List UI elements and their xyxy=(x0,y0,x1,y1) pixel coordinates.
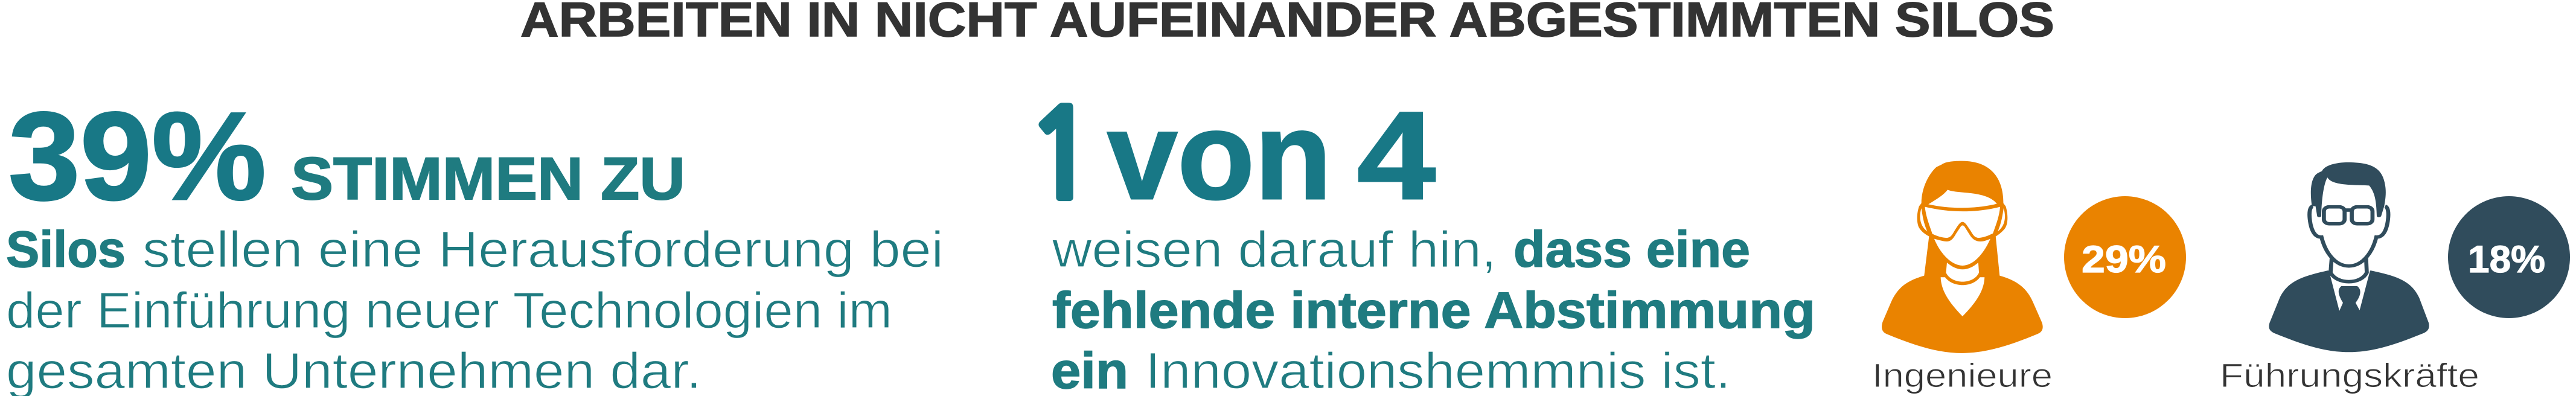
heading: stimmen zu: STIMMEN ZU xyxy=(291,145,685,212)
text block: silos description: Silos xyxy=(6,221,126,278)
big number: 39%: 39% xyxy=(8,86,266,226)
icon: engineer with goggles xyxy=(1882,161,2043,353)
circle: 18 percent: 18% xyxy=(2468,238,2545,281)
panel: executives xyxy=(2220,162,2570,394)
text block: innovation barrier: weisen darauf hin, xyxy=(1052,221,1497,278)
big number: 1 von 4 xyxy=(1025,86,1436,225)
icon: executive with glasses xyxy=(2269,162,2429,352)
text block: innovation barrier: fehlende interne Abstimmung xyxy=(1052,282,1815,339)
text block: innovation barrier: dass eine xyxy=(1513,221,1750,278)
label: executives: Führungskräfte xyxy=(2220,356,2479,394)
big number: 1 von 4: 1 xyxy=(1025,95,1099,217)
big number: 1 von 4: von xyxy=(1107,86,1332,225)
panel: 1 in 4 xyxy=(1025,86,1815,396)
text block: innovation barrier xyxy=(1051,221,1815,396)
panel: 39 percent agree xyxy=(6,86,944,396)
panel: engineers xyxy=(1872,161,2186,394)
text block: silos description xyxy=(6,221,944,396)
circle: 29 percent: 29% xyxy=(2082,238,2166,281)
label: engineers: Ingenieure xyxy=(1872,356,2053,394)
big number: 1 von 4: 4 xyxy=(1357,86,1436,225)
text block: silos description: der Einführung neuer Technologien im xyxy=(6,282,892,339)
circle: 18 percent xyxy=(2448,196,2570,318)
circle: 29 percent xyxy=(2064,196,2186,318)
text block: silos description: stellen eine Herausforderung bei xyxy=(142,221,944,278)
